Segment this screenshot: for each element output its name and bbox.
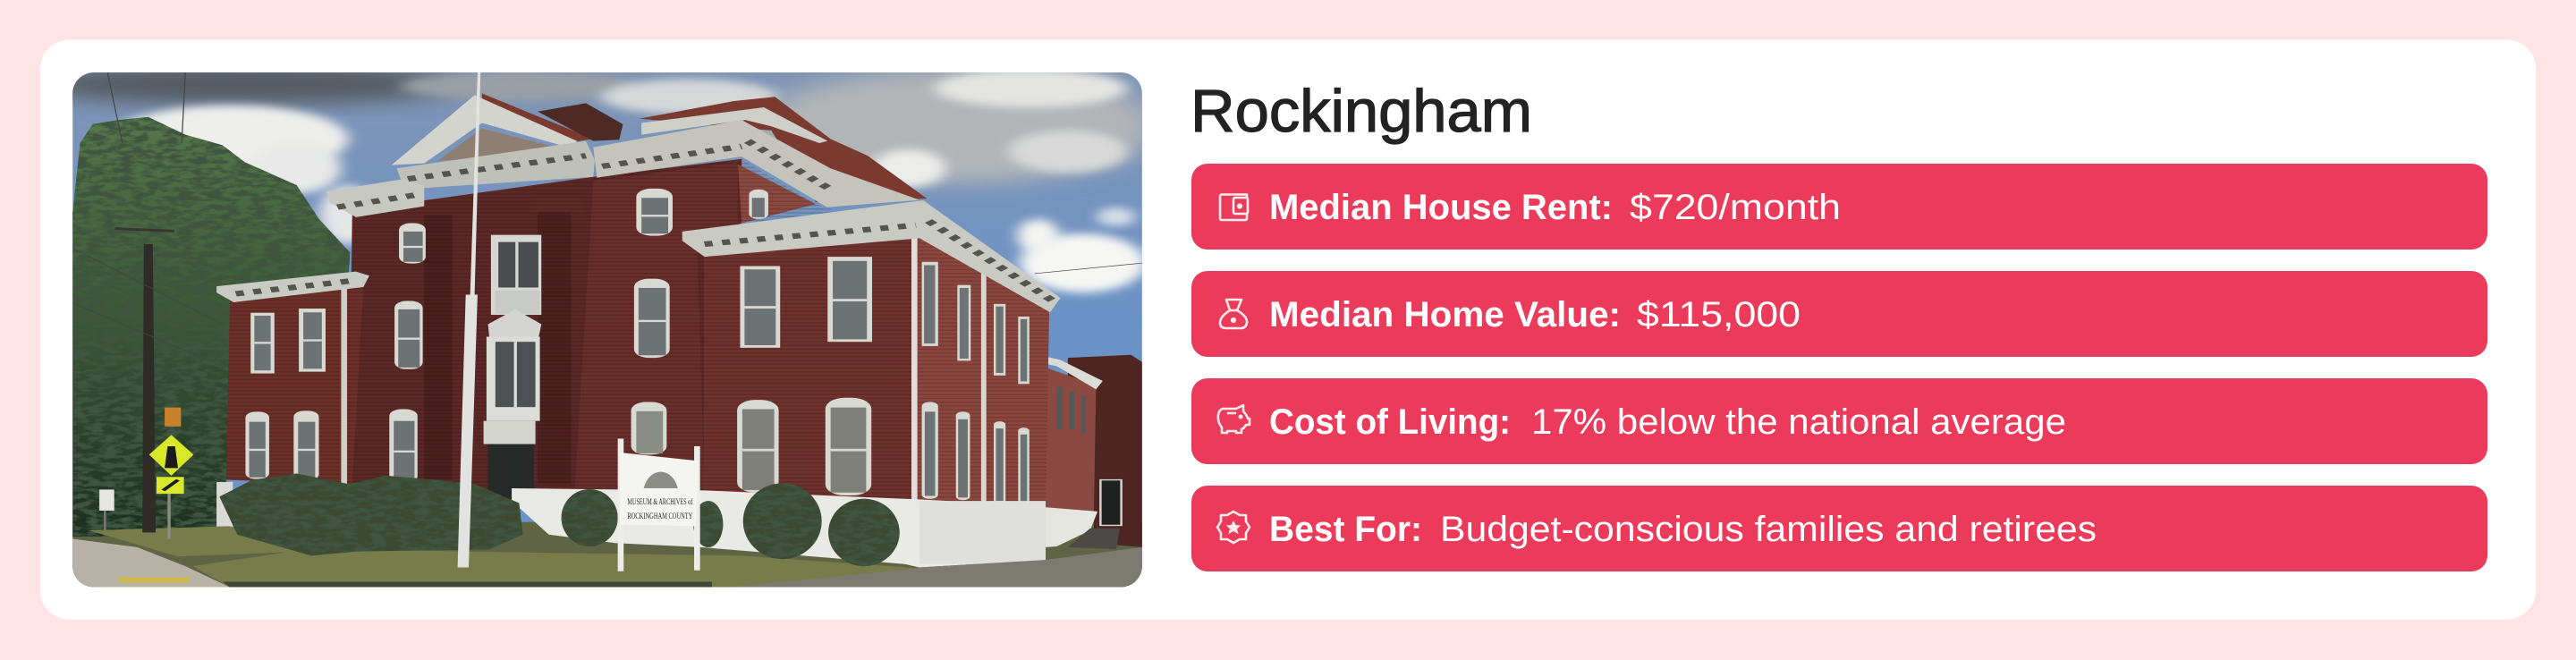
- row: cost of living: [1191, 378, 2487, 464]
- foundation: [216, 482, 1046, 568]
- value: rent: $720/month: [1630, 188, 1841, 227]
- icon: wallet: [1220, 195, 1248, 220]
- row: best for: [1191, 486, 2487, 571]
- crossing signs: [99, 408, 193, 538]
- row: median house rent: [1191, 164, 2487, 250]
- ground base: [72, 522, 1142, 588]
- windows: [245, 189, 1030, 504]
- title: Rockingham: [1191, 78, 1532, 145]
- value: best for: Budget-conscious families and retirees: [1440, 510, 2097, 549]
- icon: money bag: [1220, 300, 1247, 328]
- museum sign: [618, 438, 700, 571]
- bushes: [219, 474, 900, 566]
- ground: road, grass and sidewalk: [72, 526, 1142, 588]
- utility pole and wires: [72, 72, 1142, 532]
- brick walls: [226, 159, 1049, 510]
- value: home value: $115,000: [1637, 295, 1801, 334]
- icon: piggy bank: [1218, 405, 1250, 433]
- center bay: [484, 235, 541, 501]
- label: median home value: Median Home Value:: [1269, 295, 1621, 334]
- white cornices with dentils: [216, 95, 1061, 312]
- value: cost of living: 17% below the national average: [1531, 402, 2066, 442]
- icon: star badge: [1217, 512, 1250, 543]
- sky with clouds: [30, 64, 1157, 588]
- window glass: [250, 198, 1027, 502]
- photo: brick museum building: ROCKINGHAM COUNTY: [627, 512, 693, 520]
- main building roofs and chimney: [482, 93, 927, 202]
- photo: brick museum building: [30, 64, 1157, 588]
- rear buildings: [1042, 355, 1142, 549]
- label: median house rent: Median House Rent:: [1269, 188, 1613, 227]
- label: best for: Best For:: [1269, 510, 1422, 549]
- label: cost of living: Cost of Living:: [1269, 402, 1511, 442]
- flagpole: [458, 72, 480, 568]
- row: median home value: [1191, 271, 2487, 357]
- photo: brick museum building: MUSEUM & ARCHIVES of: [627, 497, 693, 506]
- tree: [72, 117, 350, 537]
- window rails: [250, 215, 867, 453]
